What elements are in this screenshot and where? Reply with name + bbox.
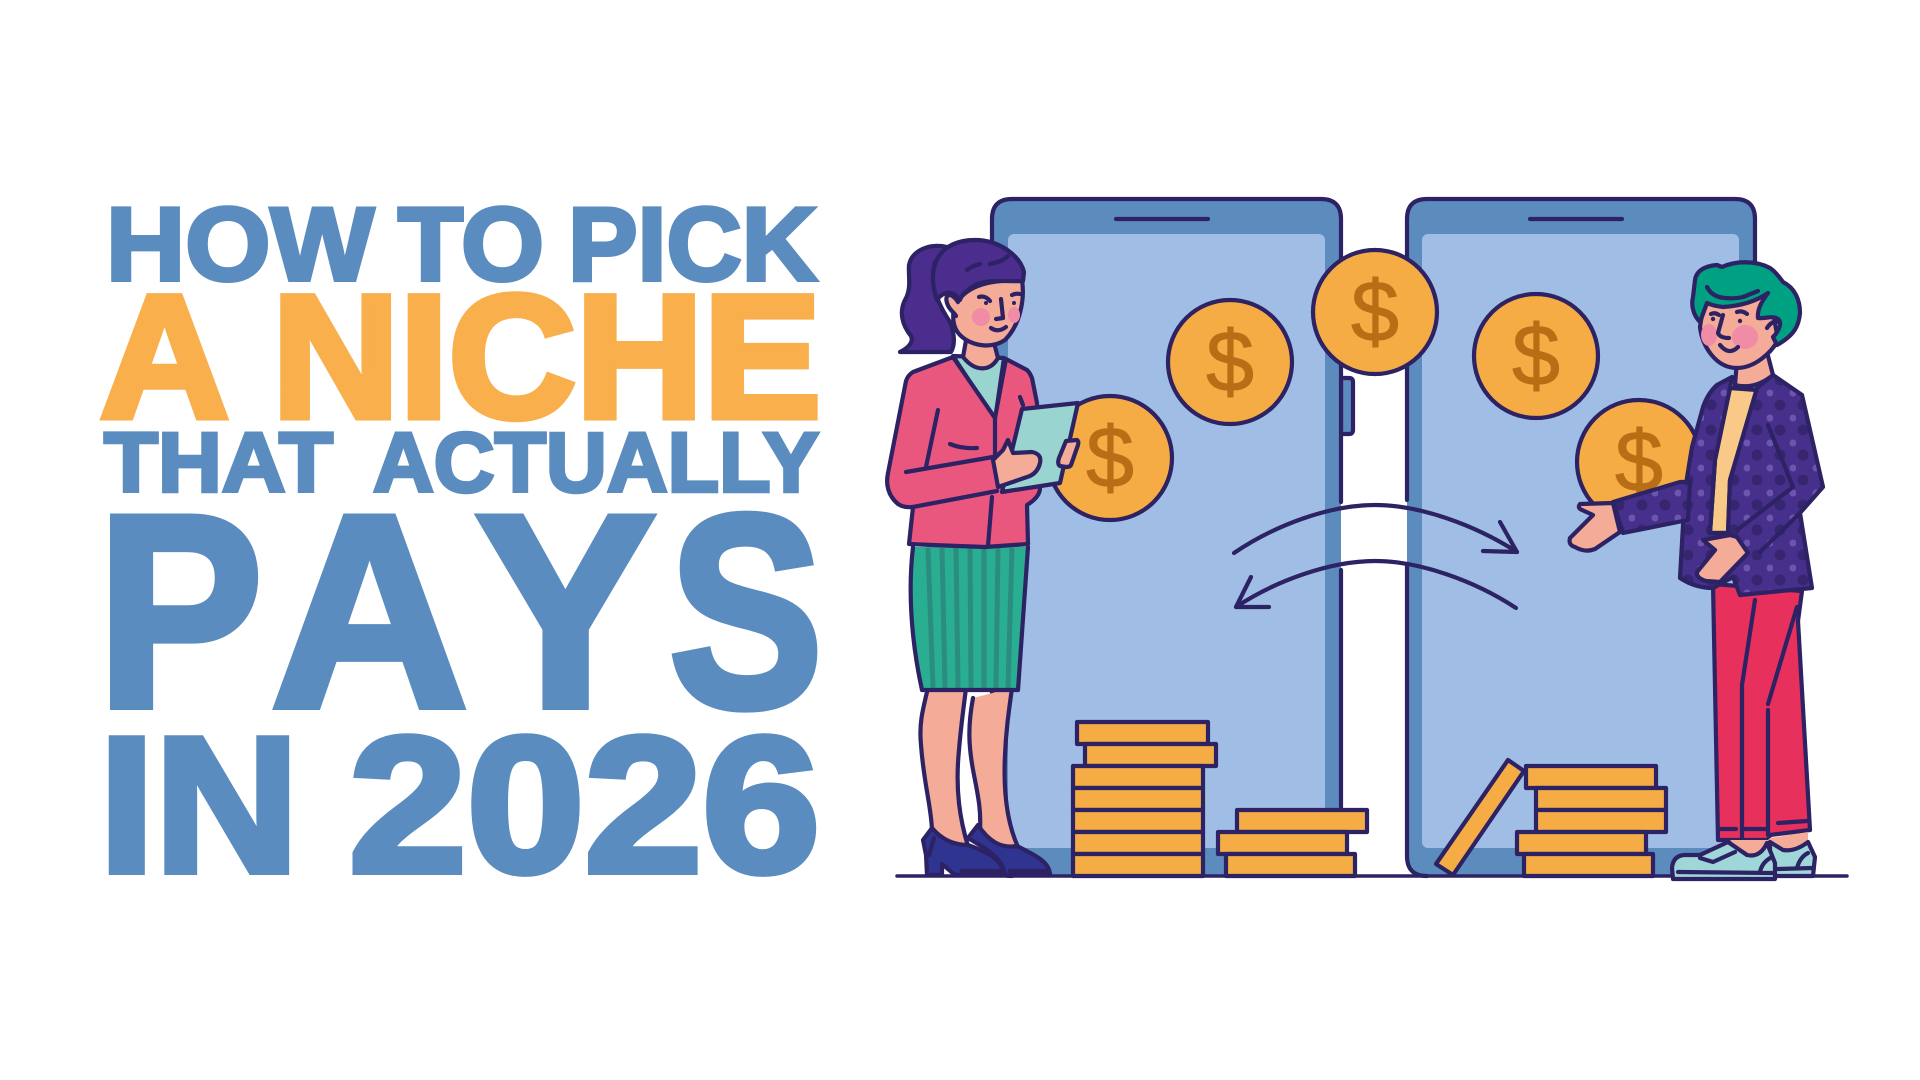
- man pants: [1713, 584, 1810, 840]
- woman neck: [963, 335, 998, 368]
- man face: [1700, 295, 1779, 368]
- coin: held by man: [1577, 400, 1701, 524]
- woman hand right: [1058, 440, 1078, 467]
- heading line: how to pick: TO: [398, 187, 544, 303]
- man hair: [1692, 262, 1800, 345]
- man arm: [1613, 482, 1690, 533]
- heading line: pays: A: [271, 459, 468, 765]
- heading line: that actually: [104, 416, 819, 510]
- man pocket hand: [1697, 535, 1748, 582]
- man jacket: [1680, 375, 1823, 595]
- woman shoes: [923, 825, 1050, 875]
- heading line: how to pick: HOW: [106, 187, 375, 303]
- woman skirt: [911, 547, 1028, 690]
- right phone: [1407, 199, 1755, 876]
- coin: top middle: [1313, 250, 1437, 374]
- arrow: right to left: [1236, 561, 1516, 608]
- woman legs: [920, 688, 1018, 847]
- coin: centre right: [1474, 294, 1598, 418]
- man open hand: [1570, 503, 1620, 551]
- heading line: how to pick: [106, 187, 817, 303]
- coin: centre left: [1168, 300, 1292, 424]
- ground line: [897, 874, 1847, 878]
- heading line: that actually: ACTUALLY: [373, 416, 819, 510]
- heading line: in 2026: [99, 696, 820, 912]
- man shirt: [1710, 388, 1757, 533]
- man: [1570, 262, 1823, 879]
- coin stack: short: [1218, 810, 1367, 876]
- heading line: a niche: NICHE: [272, 260, 821, 455]
- woman tablet: [1002, 403, 1078, 492]
- heading line: pays: Y: [476, 459, 655, 765]
- woman hand left: [993, 440, 1040, 487]
- arrow: left to right: [1234, 505, 1517, 553]
- woman face: [946, 280, 1023, 345]
- coin: centre left: $: [1206, 314, 1254, 410]
- heading line: in 2026: 2026: [349, 696, 820, 912]
- man ankles: [1730, 832, 1808, 856]
- coin: held by woman: $: [1086, 410, 1134, 506]
- woman: [887, 240, 1078, 875]
- heading line: pays: S: [669, 459, 823, 765]
- heading line: pays: P: [97, 459, 263, 765]
- title: [97, 187, 823, 912]
- coin: held by man: $: [1615, 414, 1663, 510]
- coin: held by woman: [1048, 396, 1172, 520]
- woman ponytail: [900, 246, 954, 352]
- woman hair: [933, 240, 1024, 300]
- man front shoe: [1672, 842, 1775, 879]
- woman jacket: [887, 357, 1040, 547]
- heading line: how to pick: PICK: [568, 187, 817, 303]
- heading line: pays: [97, 459, 823, 765]
- coin: centre right: $: [1512, 308, 1560, 404]
- man back shoe: [1770, 842, 1815, 876]
- coin stack: right with leaning coin: [1436, 760, 1666, 876]
- woman shirt: [953, 356, 1004, 420]
- heading line: that actually: THAT: [104, 416, 333, 510]
- heading line: in 2026: IN: [99, 696, 299, 912]
- left phone: [992, 199, 1353, 876]
- heading line: a niche: A: [100, 260, 229, 455]
- coin: top middle: $: [1351, 264, 1399, 360]
- man neck: [1735, 352, 1773, 386]
- coin stack: tall: [1073, 722, 1216, 876]
